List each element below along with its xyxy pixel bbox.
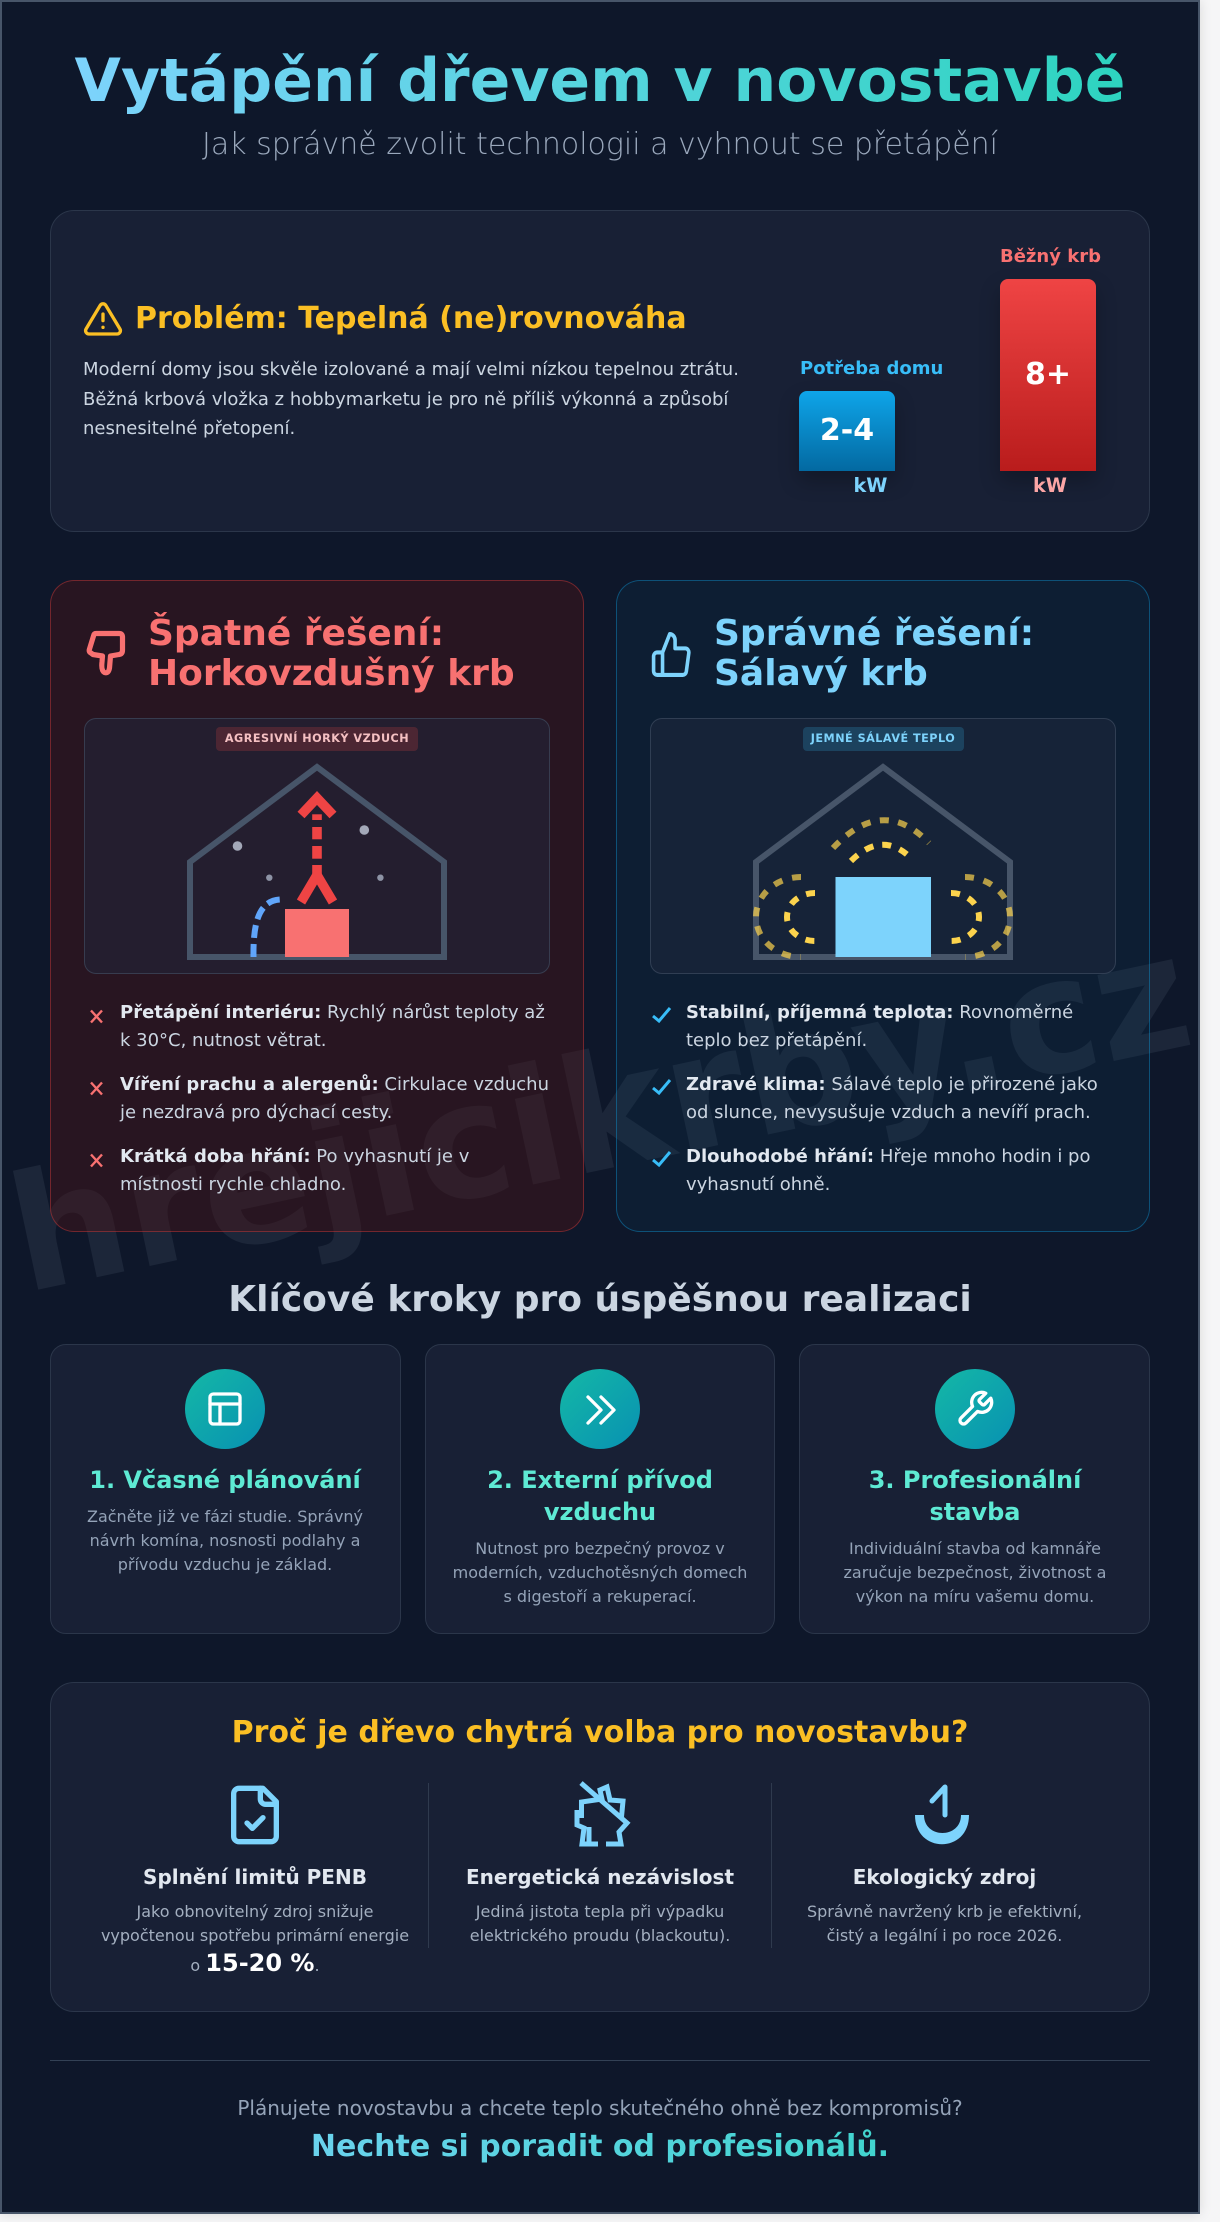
- step 2 text: moderních, vzduchotěsných domech: [453, 1563, 747, 1582]
- icon: house independence: [574, 1781, 630, 1846]
- illustration: house with hot air: [187, 763, 447, 960]
- badge: aggressive hot air: [216, 727, 418, 751]
- benefit 3: Dlouhodobé hřání: Hřeje mnoho hodin i po: [686, 1146, 1090, 1167]
- icon: layout: [185, 1369, 265, 1449]
- benefit 3: [652, 1146, 1090, 1195]
- panel: why wood: [50, 1682, 1150, 2012]
- card: step 2: [425, 1344, 775, 1634]
- step 3 heading: stavba: [930, 1498, 1020, 1526]
- label: house need: Potřeba domu: [800, 358, 943, 379]
- drawback 1: [90, 1002, 545, 1051]
- step 1 text: návrh komína, nosnosti podlahy a: [90, 1531, 360, 1550]
- panel: right solution: [616, 580, 1150, 1232]
- icon: wrench: [935, 1369, 1015, 1449]
- chart: power comparison: [799, 246, 1101, 497]
- bar: house need: [799, 391, 895, 471]
- label: ordinary fireplace: Běžný krb: [1000, 246, 1101, 267]
- PENB text: o 15-20 %.: [190, 1949, 320, 1977]
- text: problem description: Moderní domy jsou skvěle izolované a mají velmi nízkou tepelnou ztrátu.: [83, 359, 739, 380]
- step 3 heading: [869, 1466, 1082, 1526]
- heading: right solution: Sálavý krb: [714, 653, 928, 694]
- drawback 3: [90, 1146, 469, 1195]
- heading: wrong solution: Horkovzdušný krb: [148, 653, 515, 694]
- panel: problem: [50, 210, 1150, 532]
- diagram: hot air: [84, 718, 550, 974]
- icon: thumbs up: [652, 632, 691, 677]
- icon: thumbs down: [86, 630, 126, 676]
- list: drawbacks: [90, 1002, 549, 1195]
- PENB text: vypočtenou spotřebu primární energie: [101, 1926, 409, 1945]
- unit: house need: kW: [854, 474, 887, 497]
- heading: problem: Problém: Tepelná (ne)rovnováha: [135, 301, 687, 336]
- footer call to action: [50, 2127, 1150, 2167]
- drawback 2: je nezdravá pro dýchací cesty.: [120, 1102, 392, 1123]
- drawback 3: Krátká doba hřání: Po vyhasnutí je v: [120, 1146, 469, 1167]
- benefit 1: [652, 1002, 1073, 1051]
- drawback 1: Přetápění interiéru: Rychlý nárůst teploty až: [120, 1002, 545, 1023]
- bar: house need: 2-4: [820, 413, 874, 448]
- icon: warning triangle: [84, 302, 122, 336]
- independence text: elektrického proudu (blackoutu).: [470, 1926, 730, 1945]
- step 2 heading: vzduchu: [544, 1498, 656, 1526]
- footer call to action: Nechte si poradit od profesionálů.: [311, 2129, 889, 2164]
- card: step 1: [50, 1344, 401, 1634]
- independence text: [470, 1902, 730, 1945]
- drawback 1: k 30°C, nutnost větrat.: [120, 1030, 327, 1051]
- benefit 3: vyhasnutí ohně.: [686, 1174, 830, 1195]
- PENB heading: Splnění limitů PENB: [143, 1865, 367, 1889]
- PENB text: Jako obnovitelný zdroj snižuje: [136, 1902, 373, 1921]
- icon: eco source: [915, 1784, 969, 1844]
- eco text: Správně navržený krb je efektivní,: [807, 1902, 1082, 1921]
- PENB text: [101, 1902, 409, 1977]
- badge: gentle radiant heat: JEMNÉ SÁLAVÉ TEPLO: [811, 732, 955, 745]
- benefit 1: Stabilní, příjemná teplota: Rovnoměrné: [686, 1002, 1073, 1023]
- footer question: Plánujete novostavbu a chcete teplo skutečného ohně bez kompromisů?: [237, 2096, 963, 2120]
- unit: ordinary fireplace: kW: [1033, 474, 1067, 497]
- eco text: [807, 1902, 1082, 1945]
- step 2 text: [453, 1539, 747, 1606]
- step 2 heading: 2. Externí přívod: [487, 1466, 713, 1494]
- eco text: čistý a legální i po roce 2026.: [827, 1926, 1062, 1945]
- heading: right solution: Správné řešení:: [714, 613, 1034, 654]
- benefit 1: teplo bez přetápění.: [686, 1030, 867, 1051]
- heading: key steps: Klíčové kroky pro úspěšnou realizaci: [228, 1279, 972, 1320]
- benefit 2: od slunce, nevysušuje vzduch a nevíří prach.: [686, 1102, 1091, 1123]
- bar: ordinary fireplace: [1000, 279, 1096, 471]
- heading: wrong solution: [148, 612, 515, 694]
- drawback 3: místnosti rychle chladno.: [120, 1174, 346, 1195]
- footer divider: [50, 2060, 1150, 2061]
- eco heading: Ekologický zdroj: [853, 1865, 1036, 1889]
- text: problem description: [83, 359, 739, 439]
- badge: aggressive hot air: AGRESIVNÍ HORKÝ VZDUCH: [225, 732, 409, 745]
- list: benefits: [652, 1002, 1098, 1195]
- step 1 heading: 1. Včasné plánování: [89, 1466, 361, 1494]
- step 3 text: výkon na míru vašemu domu.: [856, 1587, 1094, 1606]
- benefit 2: Zdravé klima: Sálavé teplo je přirozené jako: [686, 1074, 1098, 1095]
- benefit 2: [652, 1074, 1098, 1123]
- title: Vytápění dřevem v novostavbě: [75, 46, 1125, 116]
- step 1 text: přívodu vzduchu je základ.: [118, 1555, 332, 1574]
- step 3 text: zaručuje bezpečnost, životnost a: [844, 1563, 1106, 1582]
- step 2 text: s digestoří a rekuperací.: [503, 1587, 697, 1606]
- card: step 3: [799, 1344, 1150, 1634]
- heading: right solution: [714, 613, 1034, 694]
- text: problem description: Běžná krbová vložka z hobbymarketu je pro ně příliš výkonná a způsobí: [83, 388, 728, 410]
- bar: ordinary fireplace: 8+: [1025, 357, 1071, 392]
- step 3 text: [844, 1539, 1106, 1606]
- step 1 text: Začněte již ve fázi studie. Správný: [87, 1507, 363, 1526]
- drawback 2: [90, 1074, 549, 1123]
- divider 1: [428, 1783, 429, 1948]
- step 3 heading: 3. Profesionální: [869, 1466, 1081, 1494]
- independence text: Jediná jistota tepla při výpadku: [476, 1902, 724, 1921]
- heading: wrong solution: Špatné řešení:: [148, 613, 444, 654]
- diagram: radiant heat: [650, 718, 1116, 974]
- text: problem description: nesnesitelné přetopení.: [83, 418, 295, 439]
- step 2 text: Nutnost pro bezpečný provoz v: [475, 1539, 725, 1558]
- panel: wrong solution: [50, 580, 584, 1232]
- step 1 text: [87, 1507, 363, 1574]
- independence heading: Energetická nezávislost: [466, 1865, 734, 1889]
- step 2 heading: [487, 1466, 713, 1526]
- watermark: hrejicikrby.cz: [0, 897, 1200, 1330]
- drawback 2: Víření prachu a alergenů: Cirkulace vzduchu: [120, 1074, 549, 1095]
- divider 2: [771, 1783, 772, 1948]
- icon: file check: [231, 1786, 279, 1844]
- icon: chevrons: [560, 1369, 640, 1449]
- subtitle: Jak správně zvolit technologii a vyhnout se přetápění: [202, 127, 998, 162]
- step 3 text: Individuální stavba od kamnáře: [849, 1539, 1101, 1558]
- heading: why wood: Proč je dřevo chytrá volba pro novostavbu?: [232, 1715, 968, 1750]
- badge: gentle radiant heat: [802, 727, 964, 751]
- illustration: house with radiant heat: [753, 764, 1013, 960]
